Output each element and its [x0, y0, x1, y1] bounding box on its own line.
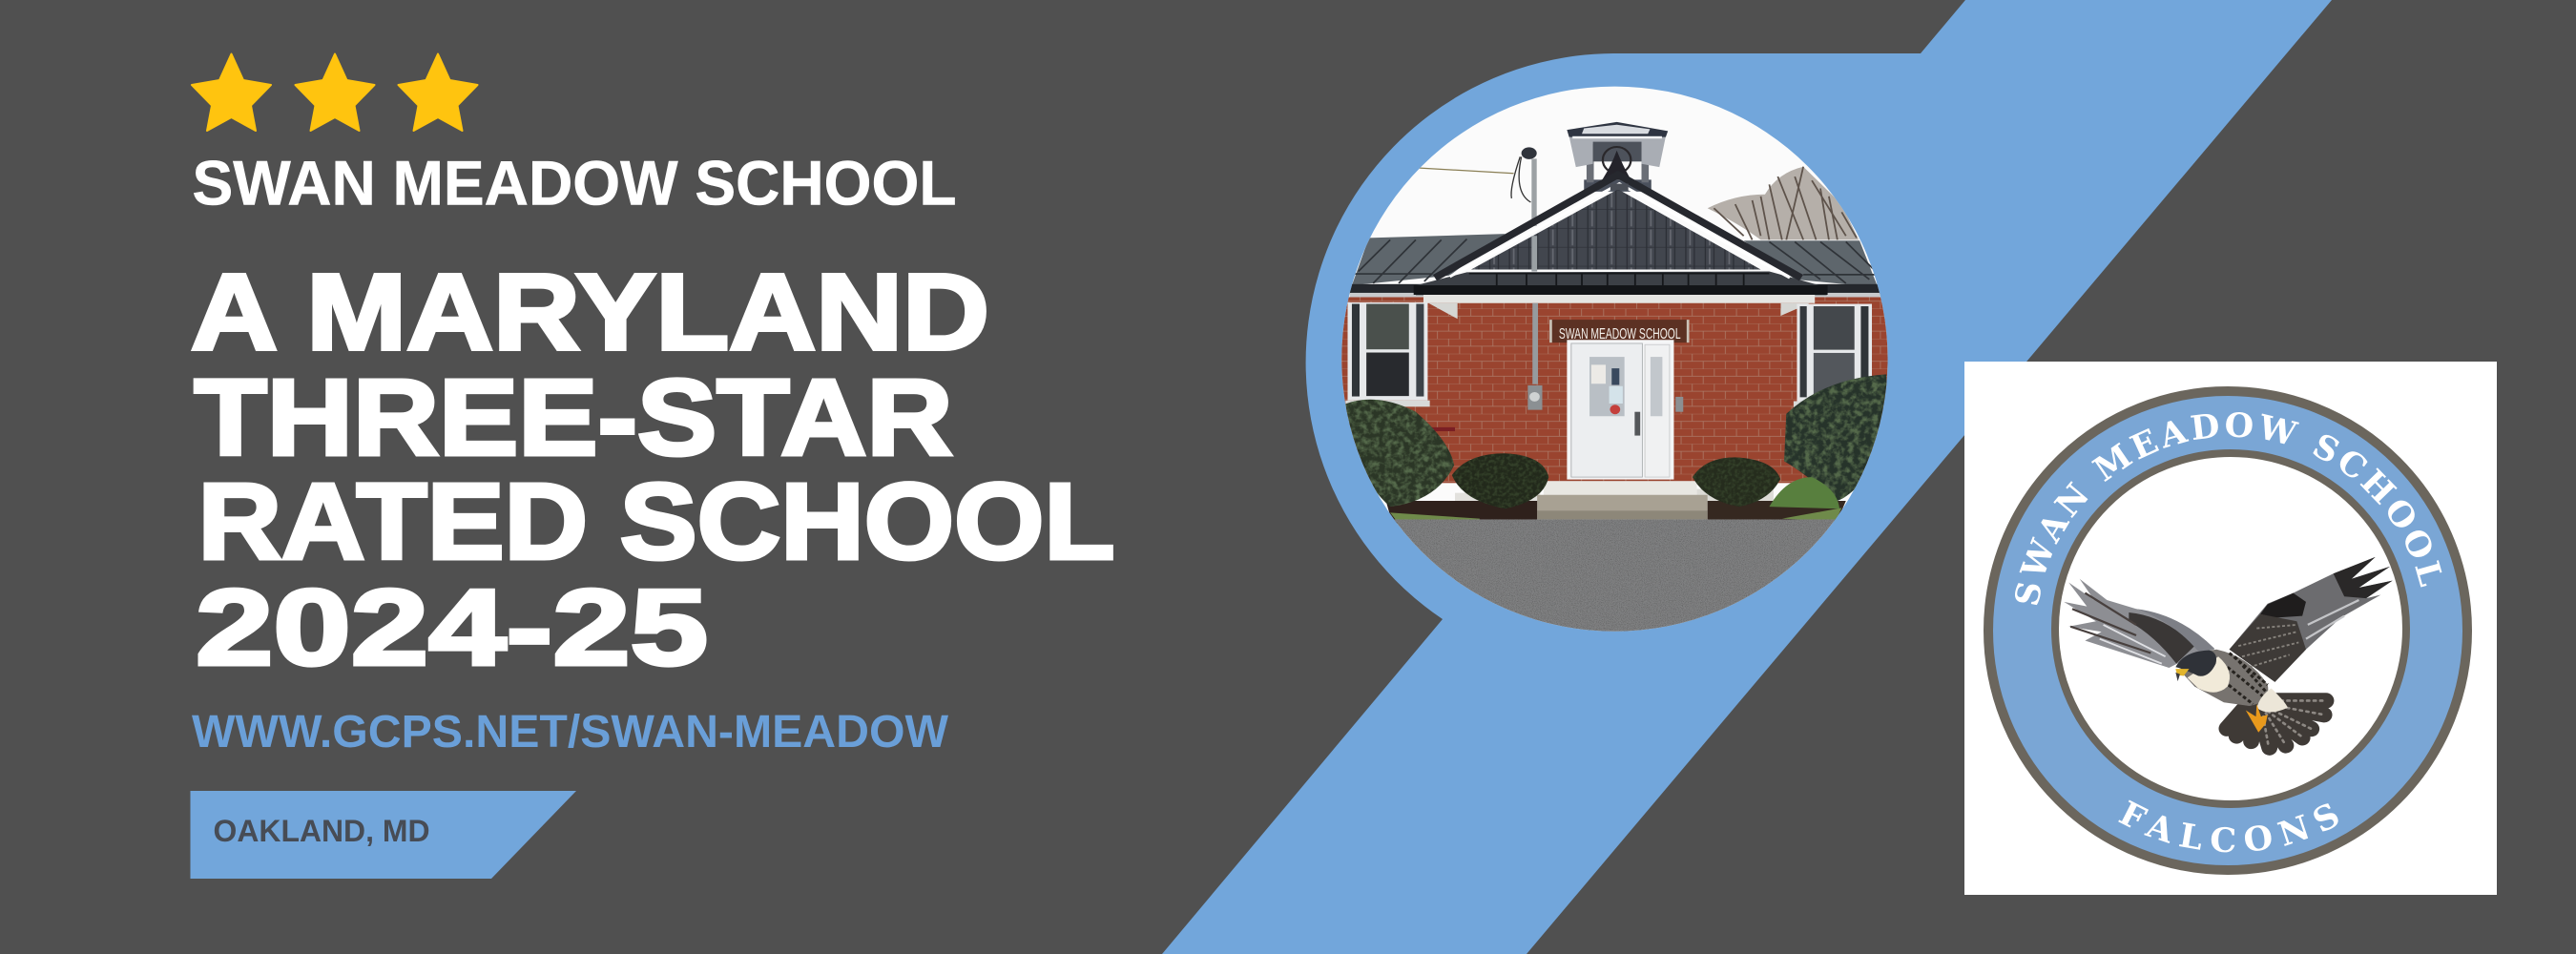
bare tree: [1708, 167, 1859, 239]
headline: THREE-STAR: [195, 357, 952, 477]
mulch and lawn: [1386, 501, 1846, 524]
shrubs: [1345, 374, 1888, 508]
left wing: [2064, 579, 2214, 668]
headline: [191, 252, 1114, 687]
school building photo: [1331, 77, 1901, 639]
entry door: [1567, 340, 1683, 480]
school sign: [1549, 320, 1690, 342]
asphalt drive: [1394, 519, 1836, 632]
website url: WWW.GCPS.NET/SWAN-MEADOW: [192, 707, 949, 757]
right window: [1794, 304, 1872, 407]
gable: [1414, 175, 1828, 319]
school name: SWAN MEADOW SCHOOL: [193, 147, 956, 218]
wire and lamp post: [1418, 147, 1537, 226]
left window: [1345, 302, 1430, 406]
body: [2175, 650, 2288, 712]
right wing: [2230, 557, 2393, 682]
headline: 2024-25: [196, 567, 708, 687]
ring text: falcons: FALCONS: [2118, 799, 2338, 853]
headline: RATED SCHOOL: [198, 462, 1114, 582]
falcon illustration: [2064, 557, 2393, 748]
logo ring: [1988, 391, 2467, 870]
tail: [2227, 700, 2326, 748]
foundation and steps: [1455, 481, 1774, 519]
logo panel: [1964, 362, 2497, 895]
diagonal blue band with circle frame: [1162, 0, 2332, 954]
headline: A MARYLAND: [191, 252, 989, 372]
conduit and meter: [1527, 303, 1543, 410]
location tag: OAKLAND, MD: [214, 814, 429, 848]
location tag: [191, 791, 576, 879]
cupola: [1567, 122, 1668, 192]
side roofs: [1350, 234, 1880, 299]
school sign: SWAN MEADOW SCHOOL: [1559, 326, 1681, 342]
red ledge: [1432, 427, 1455, 431]
brick wall: [1340, 297, 1888, 483]
three gold stars: [192, 53, 477, 131]
ring text: school name: SWAN MEADOW SCHOOL: [2015, 412, 2442, 605]
talons: [2246, 704, 2268, 733]
